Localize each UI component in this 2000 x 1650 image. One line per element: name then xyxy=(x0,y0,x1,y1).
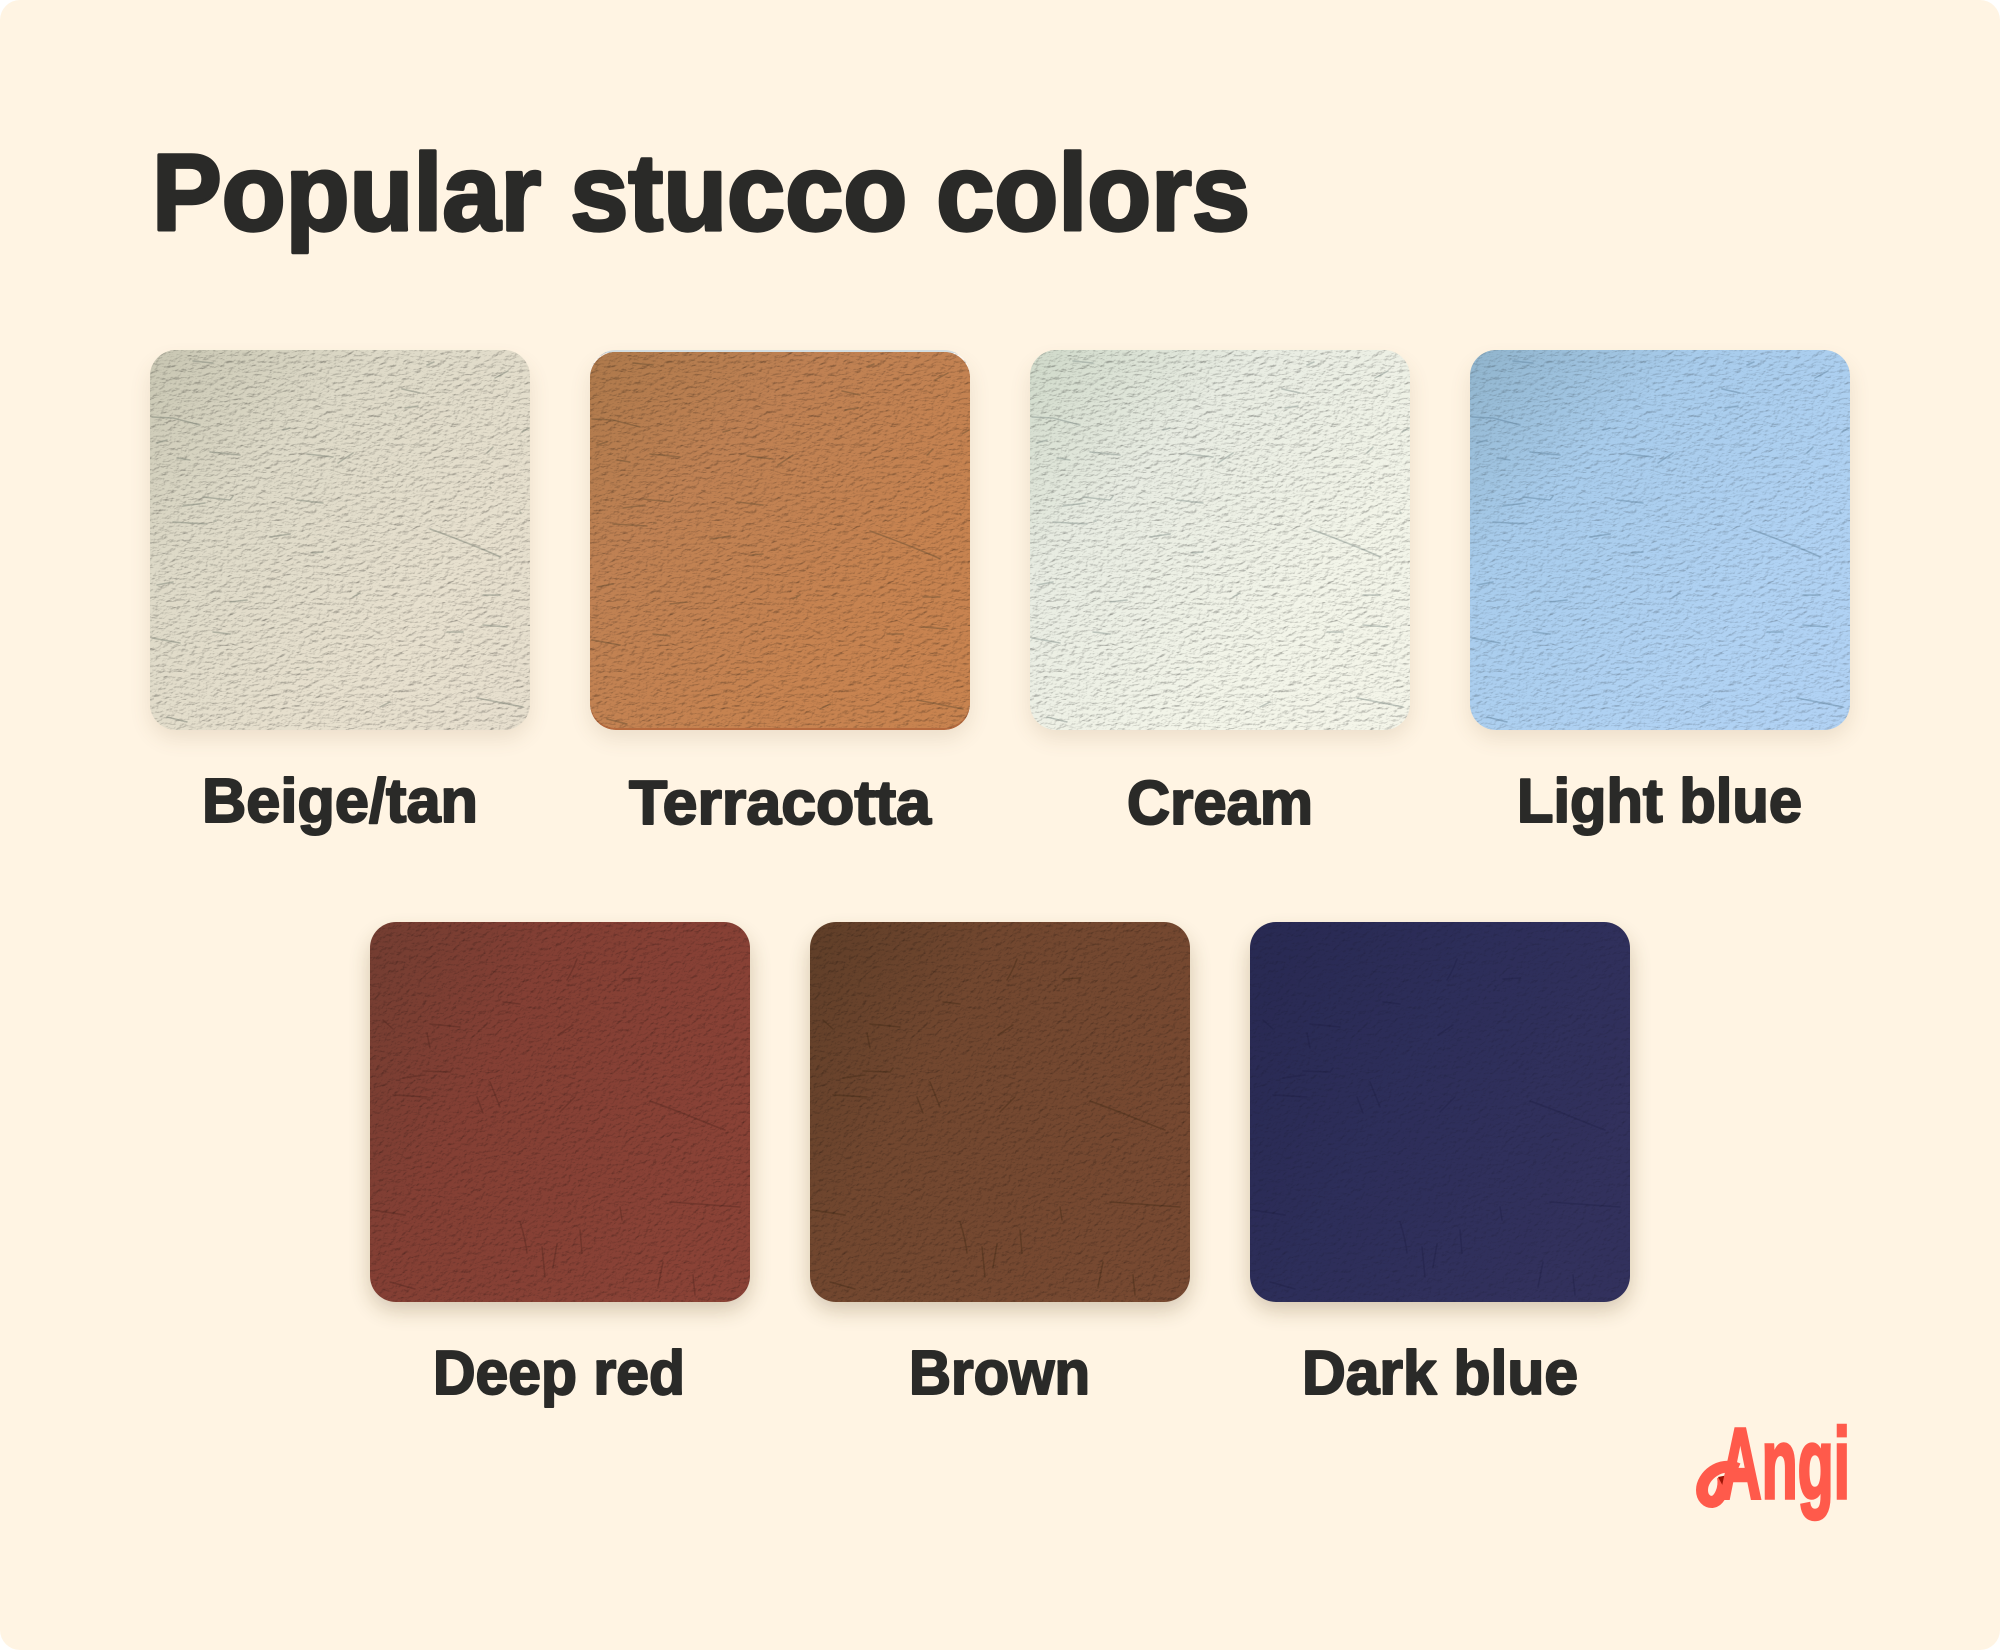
label: Deep red: Deep red xyxy=(433,1339,685,1408)
swatch: light blue stucco xyxy=(1470,350,1850,738)
card: Deep red xyxy=(370,922,750,1408)
logo: Angi: Angi xyxy=(1719,1408,1850,1520)
swatch: terracotta stucco xyxy=(590,350,970,738)
label: Cream: Cream xyxy=(1127,769,1313,838)
title: Popular stucco colors xyxy=(152,132,1250,254)
card: Cream xyxy=(1030,350,1410,838)
label: Dark blue: Dark blue xyxy=(1302,1339,1578,1408)
card: Brown xyxy=(810,922,1190,1408)
logo: Angi xyxy=(1702,1408,1850,1520)
swatch: deep red stucco xyxy=(370,922,750,1310)
card: Terracotta xyxy=(590,350,970,838)
label: Terracotta: Terracotta xyxy=(629,769,932,838)
label: Light blue: Light blue xyxy=(1517,767,1802,836)
card: Beige/tan xyxy=(150,350,530,836)
card: Dark blue xyxy=(1250,922,1630,1408)
label: Brown: Brown xyxy=(909,1339,1090,1408)
label: Beige/tan: Beige/tan xyxy=(202,767,478,836)
swatch: dark blue stucco xyxy=(1250,922,1630,1310)
swatch: brown stucco xyxy=(810,922,1190,1310)
swatch: beige/tan stucco xyxy=(150,350,530,738)
card: Light blue xyxy=(1470,350,1850,836)
swatch: cream stucco xyxy=(1030,350,1410,738)
